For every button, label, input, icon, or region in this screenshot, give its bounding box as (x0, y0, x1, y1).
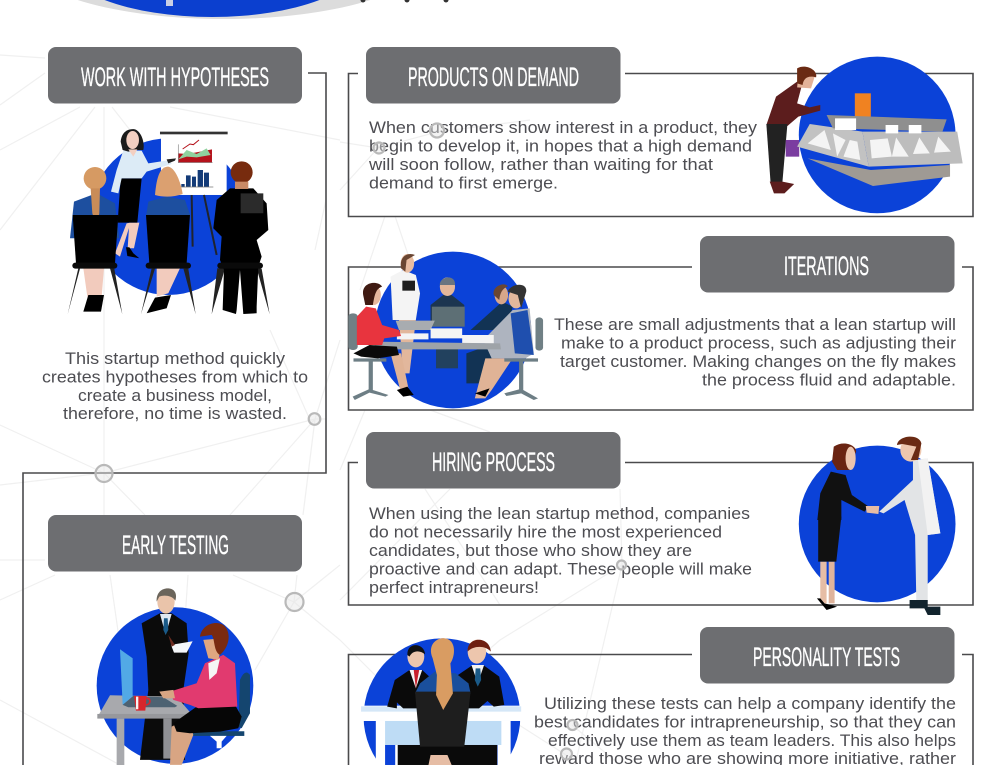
text: products on demand: When customers show interest in a product, they (369, 118, 758, 137)
heading: hiring process: HIRING PROCESS (432, 447, 555, 477)
text: personality tests: best candidates for intrapreneurship, so that they can (534, 712, 956, 732)
network nodes (96, 124, 626, 760)
illustration: candidate interview panel (357, 638, 525, 765)
text: products on demand: demand to first emerge. (369, 174, 558, 192)
illustration: team meeting around a table (348, 252, 543, 408)
text: hiring process: perfect intrapreneurs! (369, 578, 539, 597)
text: iterations: make to a product process, such as adjusting their (561, 334, 956, 352)
heading: hiring process (366, 432, 620, 488)
text: products on demand: will soon follow, rather than waiting for that (368, 155, 713, 174)
heading: early testing (48, 515, 302, 572)
illustration: customer at a display counter (766, 57, 963, 213)
heading: work with hypotheses: WORK WITH HYPOTHESES (81, 62, 269, 92)
text: hiring process: proactive and can adapt. These people will make (369, 560, 752, 578)
heading: work with hypotheses (48, 47, 302, 104)
panel: personality tests (357, 627, 956, 765)
heading: early testing: EARLY TESTING (122, 530, 229, 560)
text: personality tests (534, 694, 956, 765)
panel: early testing (48, 515, 302, 765)
heading: iterations (700, 236, 954, 292)
text: work with hypotheses: create a business model, (78, 386, 272, 405)
text: iterations: the process fluid and adaptable. (702, 370, 956, 390)
panel: products on demand (366, 47, 963, 213)
text: products on demand (368, 118, 758, 192)
text: products on demand: begin to develop it, in hopes that a high demand (369, 136, 752, 156)
text: personality tests: Utilizing these tests can help a company identify the (544, 694, 956, 713)
text: work with hypotheses (42, 349, 308, 423)
heading: products on demand (366, 47, 620, 104)
heading: products on demand: PRODUCTS ON DEMAND (408, 62, 579, 92)
text: personality tests: effectively use them as team leaders. This also helps (548, 731, 956, 750)
panel: hiring process (366, 432, 956, 615)
text: work with hypotheses: creates hypotheses from which to (42, 368, 308, 386)
text: hiring process: candidates, but those who show they are (369, 541, 692, 560)
panel: work with hypotheses (42, 47, 308, 423)
text: iterations: These are small adjustments that a lean startup will (554, 315, 956, 334)
text: iterations (554, 315, 956, 390)
panel: iterations (348, 236, 956, 408)
illustration: business handshake (799, 437, 956, 615)
illustration: team watching a presentation (68, 129, 270, 314)
heading: personality tests (700, 627, 954, 684)
text: hiring process: When using the lean startup method, companies (369, 504, 750, 523)
text: hiring process (369, 504, 752, 597)
text: work with hypotheses: therefore, no time is wasted. (63, 404, 287, 423)
text: iterations: target customer. Making changes on the fly makes (560, 352, 956, 371)
decorative header figure (25, 0, 448, 19)
text: hiring process: do not necessarily hire the most experienced (369, 522, 722, 542)
heading: iterations: ITERATIONS (784, 251, 869, 281)
text: work with hypotheses: This startup method quickly (65, 349, 286, 368)
illustration: manager and employee at a laptop (97, 588, 253, 765)
